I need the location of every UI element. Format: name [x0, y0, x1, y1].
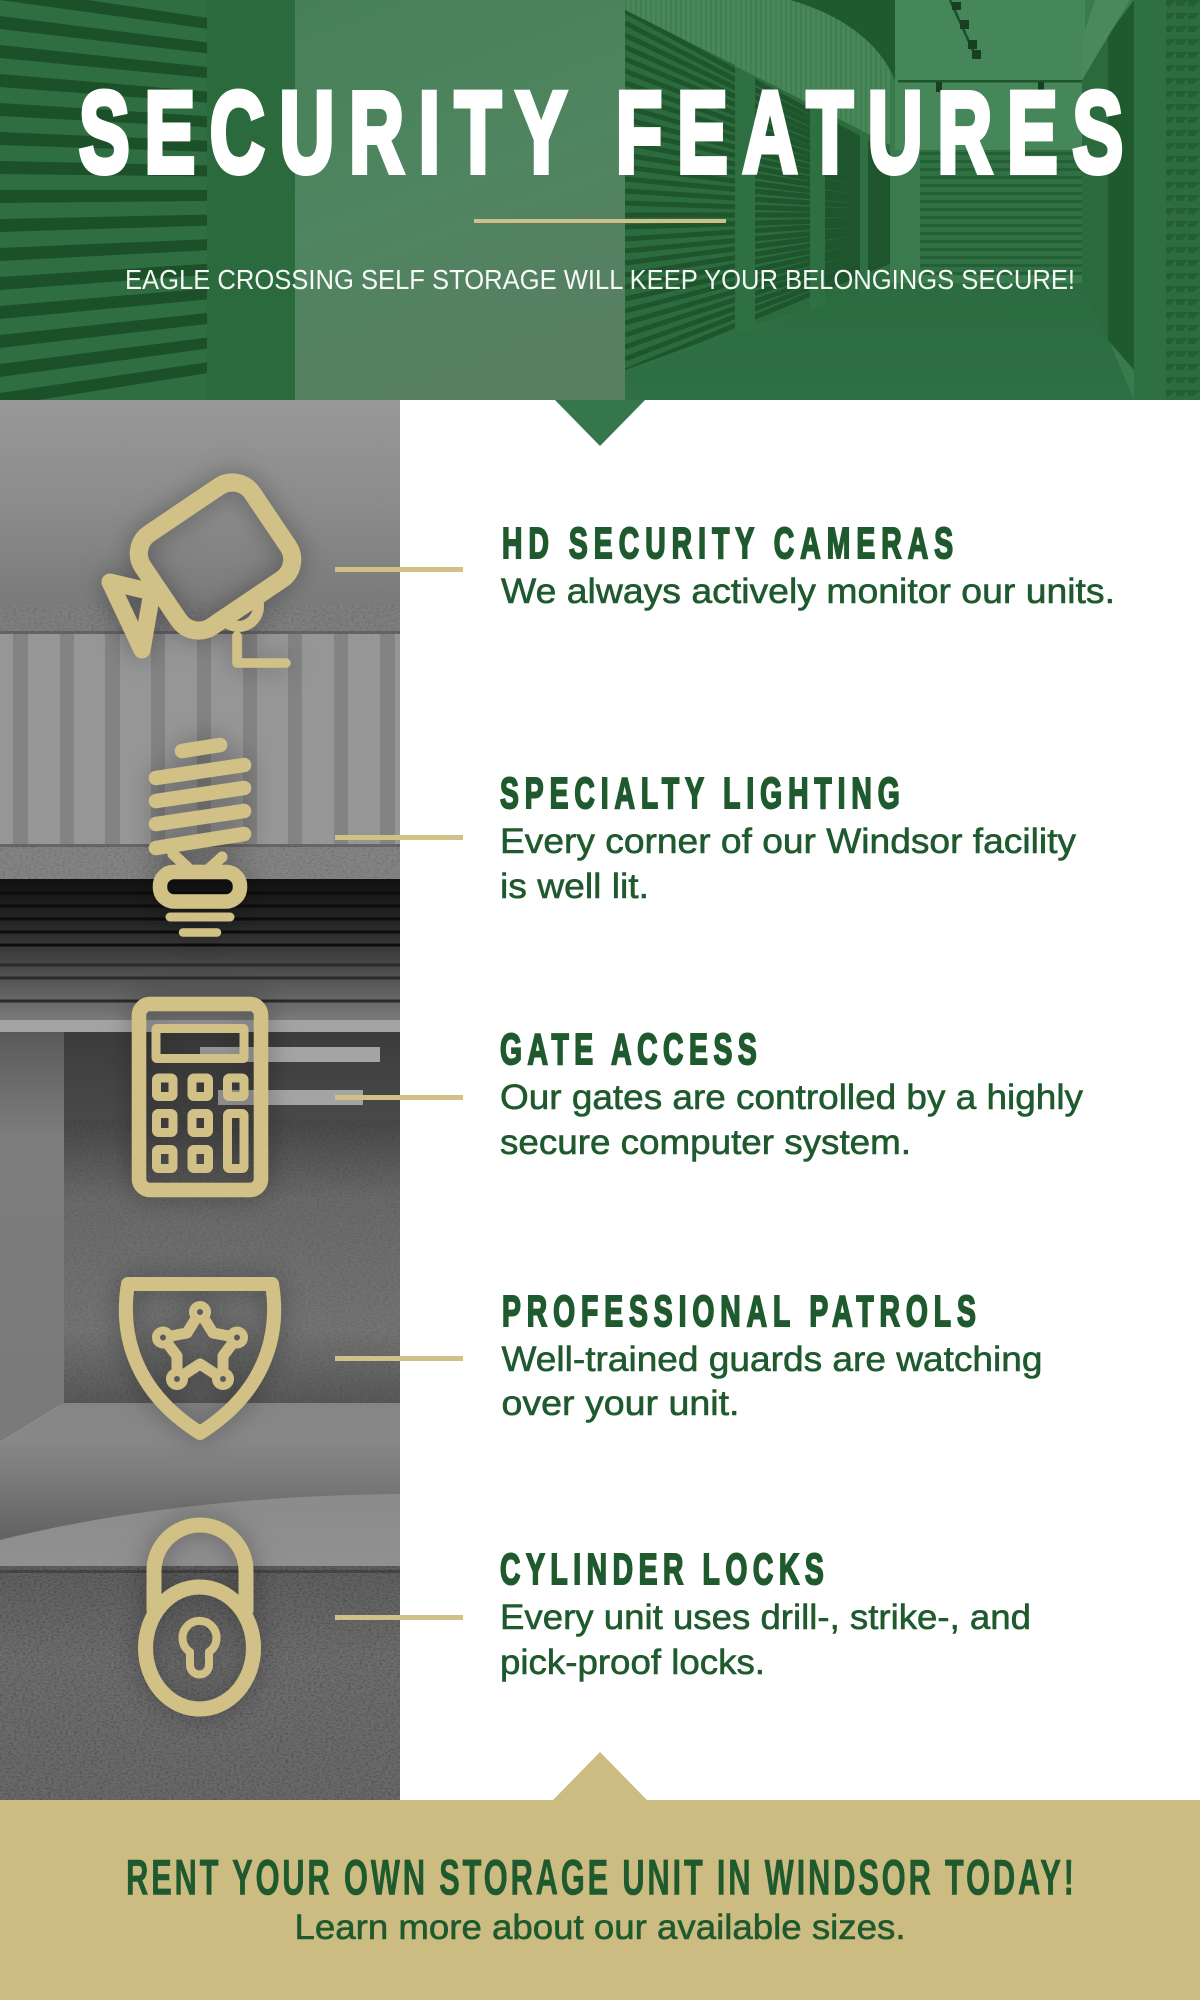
- track lights: [950, 0, 975, 55]
- title divider: [474, 219, 726, 223]
- feature: specialty lighting: SPECIALTY LIGHTING: [500, 769, 900, 817]
- subtitle: EAGLE CROSSING SELF STORAGE WILL KEEP YOUR BELONGINGS SECURE!: [125, 264, 1075, 295]
- feature: HD security cameras: [501, 519, 1115, 611]
- corridor floor: [625, 283, 1134, 400]
- arrow notch under header: [555, 400, 645, 446]
- icon: security camera: [110, 473, 302, 663]
- feature: gate access: Our gates are controlled by a highly: [500, 1078, 1084, 1117]
- feature: specialty lighting: Every corner of our Windsor facility: [500, 822, 1077, 861]
- feature: cylinder locks: [500, 1545, 1031, 1682]
- feature: HD security cameras: We always actively monitor our units.: [501, 572, 1115, 611]
- feature: cylinder locks: pick-proof locks.: [500, 1643, 765, 1682]
- feature: specialty lighting: [500, 769, 1077, 906]
- connector 1: [335, 567, 463, 572]
- feature: specialty lighting: is well lit.: [500, 867, 649, 906]
- end-of-corridor door: [920, 150, 1082, 275]
- footer headline: RENT YOUR OWN STORAGE UNIT IN WINDSOR TODAY!: [126, 1849, 1074, 1905]
- feature: gate access: secure computer system.: [500, 1123, 911, 1162]
- icon: light bulb: [156, 745, 244, 932]
- footer subline: Learn more about our available sizes.: [294, 1908, 906, 1947]
- icon: gate keypad: [139, 1004, 261, 1190]
- icon: padlock: [146, 1525, 254, 1709]
- feature: professional patrols: over your unit.: [502, 1384, 740, 1423]
- footer band: [0, 1752, 1200, 2000]
- corridor walls and ceiling: [625, 0, 1085, 400]
- corridor roller doors: [625, 10, 890, 371]
- header banner: [0, 0, 1200, 406]
- feature: cylinder locks: Every unit uses drill-, strike-, and: [500, 1598, 1031, 1637]
- concrete pillar: [207, 0, 295, 400]
- feature: gate access: [500, 1025, 1084, 1162]
- feature: HD security cameras: HD SECURITY CAMERAS: [502, 519, 953, 567]
- connector 4: [335, 1356, 463, 1361]
- feature: cylinder locks: CYLINDER LOCKS: [500, 1545, 824, 1593]
- connector 3: [335, 1095, 463, 1100]
- connector 2: [335, 835, 463, 840]
- pale wall panel: [295, 0, 625, 400]
- connector 5: [335, 1615, 463, 1620]
- left photo panel: [0, 400, 400, 1800]
- feature: gate access: GATE ACCESS: [500, 1025, 757, 1073]
- feature: professional patrols: [502, 1287, 1042, 1423]
- title: SECURITY FEATURES: [79, 68, 1123, 197]
- left roller shutter: [0, 0, 207, 406]
- icon: badge shield: [126, 1284, 274, 1433]
- feature: professional patrols: Well-trained guards are watching: [502, 1340, 1042, 1379]
- feature: professional patrols: PROFESSIONAL PATROLS: [502, 1287, 976, 1335]
- right wall and doors: [1082, 0, 1200, 400]
